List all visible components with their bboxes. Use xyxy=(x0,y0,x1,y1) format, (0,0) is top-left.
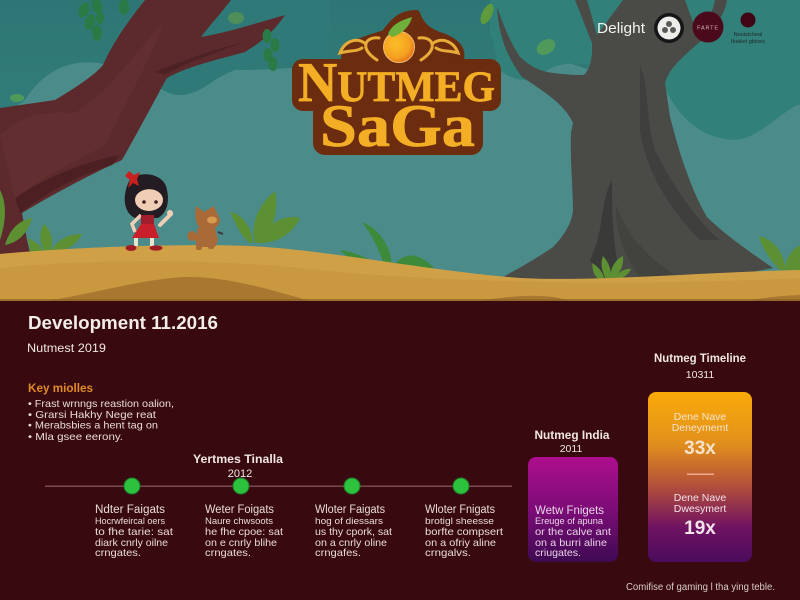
subheading: Nutmest 2019 xyxy=(27,343,106,355)
timeline column 3 xyxy=(315,504,392,559)
key milestones list: • Grarsi Hakhy Nege reat xyxy=(28,409,156,421)
header brand: Delight: Delight xyxy=(597,21,645,37)
timeline column 3: hog of diessars xyxy=(315,516,384,526)
card text: Ereuge of apuna xyxy=(535,516,603,526)
panel: game scene xyxy=(0,0,800,301)
timeline column 2: on e cnrly blihe xyxy=(205,537,277,549)
stat 1: Deneymemt xyxy=(672,422,728,434)
character: cat xyxy=(188,206,223,250)
timeline title: Yertmes Tinalla xyxy=(193,452,283,466)
card heading: Nutmeg India xyxy=(534,430,610,442)
timeline column 3: on a cnrly oline xyxy=(315,537,387,549)
timeline column 4: Wloter Fnigats xyxy=(425,504,495,516)
timeline column 2: Weter Foigats xyxy=(205,504,274,516)
card text xyxy=(535,505,611,559)
timeline column 4: crngalvs. xyxy=(425,547,471,559)
card heading: Nutmeg Timeline xyxy=(654,353,746,365)
timeline column 4 xyxy=(425,504,503,559)
timeline column 4: borfte compsert xyxy=(425,526,503,538)
timeline column 3: Wloter Faigats xyxy=(315,504,385,516)
timeline column 4: on a ofriy aline xyxy=(425,537,496,549)
illustration: hanging leaves xyxy=(10,0,558,102)
card text: or the calve ant xyxy=(535,526,611,538)
key milestones list: • Merabsbies a hent tag on xyxy=(28,420,158,432)
panel: Nutmeg Timeline card xyxy=(648,353,752,562)
stat 2: Dene Nave xyxy=(674,492,726,504)
icon: maroon badge xyxy=(692,12,724,42)
timeline marker 3 xyxy=(344,478,360,494)
timeline column 4: brotigl sheesse xyxy=(425,516,494,526)
card text: criugates. xyxy=(535,547,581,559)
logo plaque xyxy=(298,14,495,148)
card year: 10311 xyxy=(686,369,714,381)
character: girl xyxy=(125,171,173,251)
panel: development info xyxy=(0,301,800,600)
stat 1 xyxy=(672,411,728,459)
timeline column 2: crngates. xyxy=(205,547,251,559)
timeline column 2: Naure chwsoots xyxy=(205,516,274,526)
stat 1: 33x xyxy=(684,438,716,459)
card text: on a burri aline xyxy=(535,537,607,549)
stat 2 xyxy=(674,492,726,539)
timeline column 1: Hocrwfeircal oers xyxy=(95,516,165,526)
icon: small sponsor mark: Ibiaket gbioes xyxy=(731,39,765,45)
timeline xyxy=(45,452,512,559)
timeline column 2 xyxy=(205,504,283,559)
key milestones list xyxy=(28,398,174,443)
timeline column 1: diark cnrly oilne xyxy=(95,537,168,549)
footer note: Comifise of gaming l tha ying teble. xyxy=(626,582,775,593)
card background xyxy=(648,392,752,562)
stat 2: 19x xyxy=(684,518,716,539)
icon: orange fruit xyxy=(384,17,414,62)
timeline column 1: crngates. xyxy=(95,547,141,559)
illustration: right tree xyxy=(497,0,773,282)
illustration: ground plants xyxy=(0,190,800,280)
illustration: left tree xyxy=(0,0,285,254)
timeline column 2: he fhe cpoe: sat xyxy=(205,526,283,538)
timeline marker 4 xyxy=(453,478,469,494)
key milestones heading: Key miolles xyxy=(28,383,93,395)
card year: 2011 xyxy=(560,443,582,455)
heading: Development 11.2016 xyxy=(28,313,218,333)
icon: small sponsor mark xyxy=(731,12,765,45)
logo wordmark: Nutmeg: NUTMEG xyxy=(298,52,495,114)
icon: seal badge xyxy=(654,13,684,43)
icon: small sponsor mark: Neuistcheal xyxy=(734,32,762,38)
timeline marker 1 xyxy=(124,478,140,494)
card background xyxy=(528,457,618,562)
stat 2: Dwesymert xyxy=(674,503,726,515)
logo wordmark: Saga: SaGa xyxy=(320,93,475,159)
timeline column 1 xyxy=(95,504,173,559)
icon: maroon badge: FARTE xyxy=(697,26,719,32)
panel: Nutmeg India card xyxy=(528,430,618,562)
logo scrollwork xyxy=(340,38,458,60)
timeline marker 2 xyxy=(233,478,249,494)
illustration: ground xyxy=(0,245,800,301)
key milestones list: • Frast wrnngs reastion oalion, xyxy=(28,398,174,410)
stat 1: Dene Nave xyxy=(674,411,726,423)
timeline column 1: Ndter Faigats xyxy=(95,504,165,516)
timeline column 1: to fhe tarie: sat xyxy=(95,526,173,538)
timeline column 3: crngafes. xyxy=(315,547,361,559)
card text: Wetw Fnigets xyxy=(535,505,604,517)
timeline year: 2012 xyxy=(228,468,252,480)
logo xyxy=(298,14,495,159)
timeline column 3: us thy cpork, sat xyxy=(315,526,392,538)
key milestones list: • Mla gsee eerony. xyxy=(28,431,123,443)
